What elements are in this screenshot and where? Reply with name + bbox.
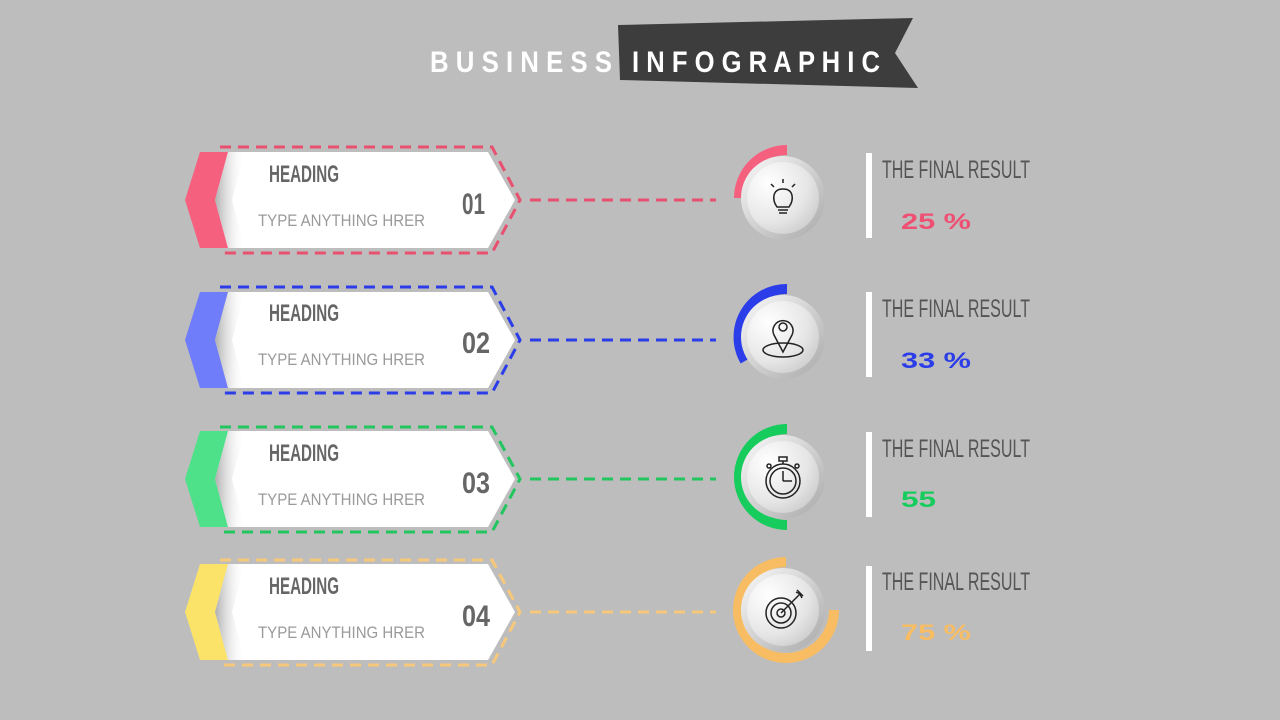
result 4 (866, 566, 1030, 651)
title banner: I N F O G R A P H I C (632, 46, 880, 79)
result 3: 55 (901, 487, 936, 512)
row 2 (185, 287, 1030, 393)
result 4: 75 % (901, 620, 971, 645)
result 1: THE FINAL RESULT (882, 156, 1030, 184)
card 1: TYPE ANYTHING HRER (258, 211, 425, 230)
card 2: TYPE ANYTHING HRER (258, 350, 425, 369)
result 1 (866, 153, 1030, 238)
card 4: 04 (462, 600, 490, 633)
result 1: 25 % (901, 209, 971, 234)
card 4: HEADING (269, 573, 339, 600)
progress ring 55 with stopwatch icon (739, 429, 825, 525)
result 4: THE FINAL RESULT (882, 568, 1030, 596)
card 4: TYPE ANYTHING HRER (258, 623, 425, 642)
card 3: HEADING (269, 440, 339, 467)
connector 3 (530, 478, 716, 480)
result 2 (866, 292, 1030, 377)
row 4 (185, 560, 1030, 665)
card 4 (185, 560, 520, 665)
connector 1 (530, 198, 716, 202)
progress ring 25% with bulb icon (739, 150, 825, 240)
title banner (618, 18, 918, 88)
card 1 (185, 147, 520, 253)
card 3 (185, 427, 520, 532)
card 3: TYPE ANYTHING HRER (258, 490, 425, 509)
result 3: THE FINAL RESULT (882, 435, 1030, 463)
connector 2 (530, 338, 716, 342)
card 3: 03 (462, 467, 490, 500)
card 2: HEADING (269, 300, 339, 327)
result 2: THE FINAL RESULT (882, 295, 1030, 323)
connector 4 (530, 610, 716, 614)
title: BUSINESS: B U S I N E S S (430, 46, 612, 79)
card 1: 01 (462, 188, 485, 221)
result 3 (866, 432, 1030, 517)
card 2 (185, 287, 520, 393)
title (430, 18, 918, 88)
card 1: HEADING (269, 161, 339, 188)
progress ring 75% with target icon (738, 562, 834, 658)
progress ring 33% with location icon (739, 289, 825, 379)
card 2: 02 (462, 327, 490, 360)
row 3 (185, 427, 1030, 532)
row 1 (185, 147, 1030, 253)
result 2: 33 % (901, 348, 971, 373)
